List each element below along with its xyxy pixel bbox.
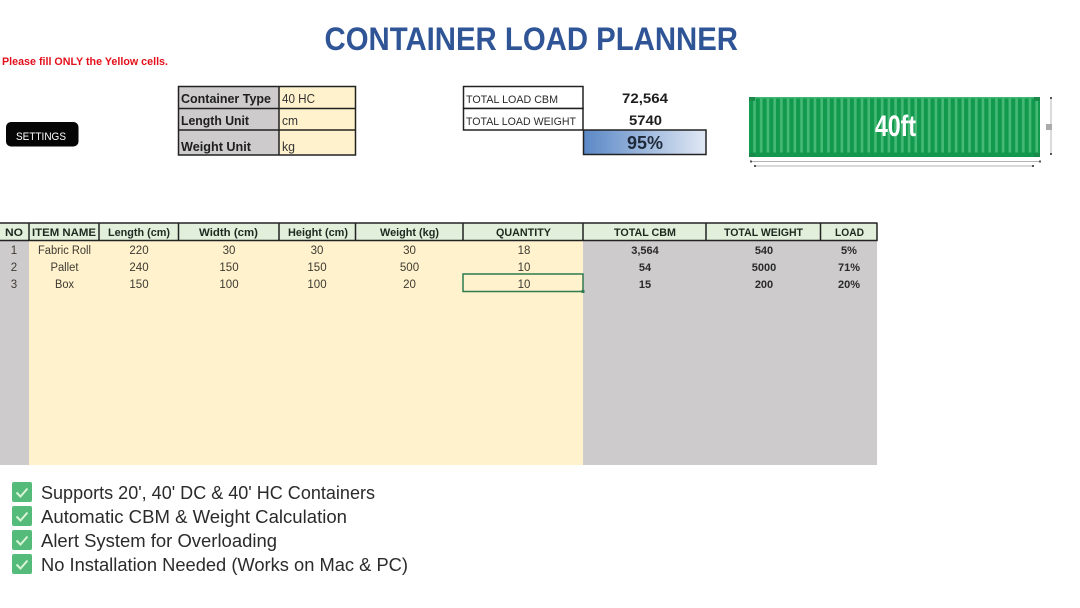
table row 1: Fabric Roll: 18	[518, 245, 530, 257]
panel: container settings table: Length Unit	[181, 114, 250, 128]
feature: container support: Supports 20', 40' DC & 40' HC Containers	[41, 482, 375, 503]
table row 3: Box: 20%	[838, 279, 860, 291]
table row 3: Box: 3	[11, 279, 17, 291]
panel: container settings table	[178, 86, 356, 155]
feature: overload alerts: Alert System for Overloading	[41, 530, 277, 551]
panel: load totals: 72,564	[622, 90, 668, 106]
icon: 40ft shipping container	[749, 97, 1052, 167]
table row 2: Pallet: 150	[219, 262, 239, 274]
table row 2: Pallet	[11, 262, 860, 274]
settings button: SETTINGS	[16, 131, 66, 143]
panel: container settings table: cm	[282, 114, 298, 128]
table header row: TOTAL CBM	[614, 227, 676, 239]
panel: cargo table body	[0, 241, 877, 465]
table header row: NO	[5, 227, 23, 239]
table header row: Weight (kg)	[380, 227, 439, 239]
table row 2: Pallet: Pallet	[50, 262, 79, 274]
table row 2: Pallet: 5000	[752, 262, 776, 274]
feature list	[12, 482, 408, 575]
table row 3: Box: 20	[403, 279, 416, 291]
table row 1: Fabric Roll: 30	[403, 245, 416, 257]
table row 3: Box: 200	[755, 279, 773, 291]
load progress bar	[584, 130, 706, 154]
table row 1: Fabric Roll: 1	[11, 245, 17, 257]
icon: 40ft shipping container: 40ft	[875, 110, 916, 143]
table header row: ITEM NAME	[32, 227, 96, 239]
feature: no installation: No Installation Needed (Works on Mac & PC)	[41, 554, 408, 575]
panel: load totals: TOTAL LOAD CBM	[466, 94, 558, 106]
table row 3: Box: 15	[639, 279, 651, 291]
panel: container settings table: Container Type	[181, 92, 271, 106]
table row 1: Fabric Roll: Fabric Roll	[38, 245, 91, 257]
panel: load totals	[464, 86, 706, 154]
panel: container settings table: kg	[282, 140, 295, 154]
table row 2: Pallet: 10	[518, 262, 530, 274]
load progress bar: 95%	[627, 132, 663, 153]
table row 2: Pallet: 2	[11, 262, 17, 274]
table row 3: Box	[11, 279, 860, 291]
table header row: LOAD	[835, 227, 864, 239]
table row 3: Box: 100	[219, 279, 239, 291]
table row 2: Pallet: 500	[400, 262, 419, 274]
table row 2: Pallet: 240	[129, 262, 149, 274]
table row 3: Box: 150	[129, 279, 149, 291]
panel: container settings table: Weight Unit	[181, 140, 252, 154]
table row 1: Fabric Roll: 540	[755, 245, 773, 257]
table row 1: Fabric Roll	[11, 245, 857, 257]
table row 2: Pallet: 54	[639, 262, 652, 274]
table row 2: Pallet: 150	[307, 262, 327, 274]
table row 1: Fabric Roll: 5%	[841, 245, 857, 257]
table header row: Width (cm)	[199, 227, 258, 239]
table header row: Length (cm)	[108, 227, 170, 239]
table header row: TOTAL WEIGHT	[724, 227, 803, 239]
table header row: Height (cm)	[288, 227, 348, 239]
selected cell outline	[463, 274, 584, 293]
settings button	[6, 122, 78, 146]
feature: automatic calculation: Automatic CBM & Weight Calculation	[41, 506, 347, 527]
table row 3: Box: 100	[307, 279, 327, 291]
instruction note: Please fill ONLY the Yellow cells.	[2, 56, 168, 68]
panel: load totals: 5740	[629, 112, 662, 128]
table row 3: Box: 10	[518, 279, 530, 291]
table header row: QUANTITY	[496, 227, 552, 239]
panel: load totals: TOTAL LOAD WEIGHT	[466, 116, 576, 128]
table row 1: Fabric Roll: 3,564	[631, 245, 660, 257]
table row 1: Fabric Roll: 30	[311, 245, 323, 257]
table row 3: Box: Box	[55, 279, 74, 291]
table row 1: Fabric Roll: 220	[129, 245, 149, 257]
table header row	[0, 223, 878, 241]
table row 2: Pallet: 71%	[838, 262, 860, 274]
title: CONTAINER LOAD PLANNER	[324, 21, 738, 57]
table row 1: Fabric Roll: 30	[223, 245, 235, 257]
panel: container settings table: 40 HC	[282, 92, 315, 106]
